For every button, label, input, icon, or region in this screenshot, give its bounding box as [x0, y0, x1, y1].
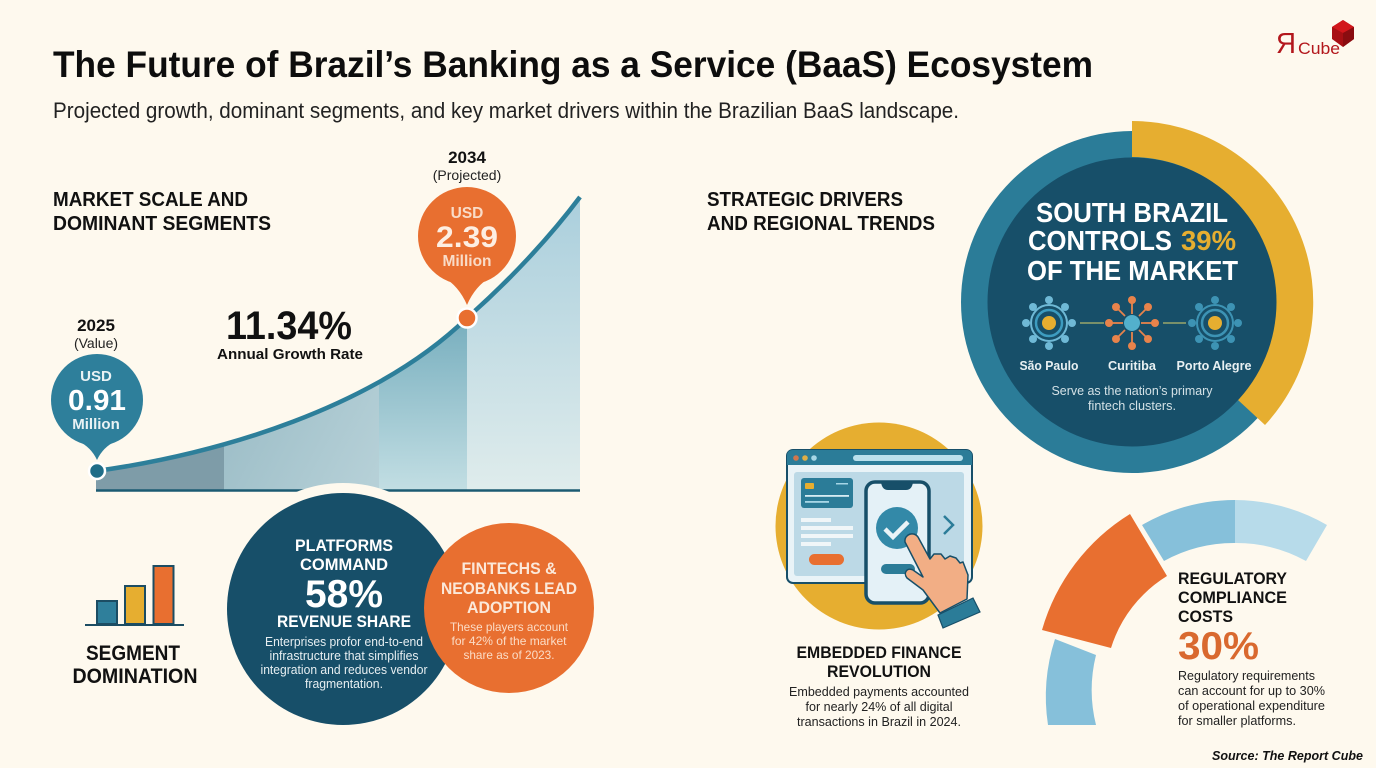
text: embedded finance: transactions in Brazil in 2024.	[797, 715, 961, 729]
browser window	[787, 450, 972, 583]
panel: platforms revenue share: PLATFORMS	[295, 537, 393, 555]
connector lines	[1080, 322, 1186, 324]
description: Serve as the nation’s primary	[1052, 383, 1213, 398]
heading: market scale: DOMINANT SEGMENTS	[53, 213, 271, 235]
panel: platforms revenue share: infrastructure that simplifies	[270, 649, 418, 663]
pin: 2025 value	[51, 354, 143, 479]
year label 2034	[433, 148, 501, 183]
headline: 39%	[1181, 225, 1236, 256]
heading: segment domination	[72, 642, 198, 688]
text: embedded finance: Embedded payments accounted	[789, 685, 969, 699]
panel: fintechs and neobanks: These players account	[450, 620, 569, 634]
text: regulatory compliance: 30%	[1178, 625, 1259, 668]
heading: strategic drivers	[707, 189, 935, 235]
inner dark disc	[988, 158, 1276, 446]
headline	[1027, 197, 1238, 286]
text: regulatory compliance: REGULATORY	[1178, 569, 1288, 588]
text: regulatory compliance: COMPLIANCE	[1178, 588, 1287, 607]
panel: fintechs and neobanks	[424, 523, 594, 693]
icon: São Paulo network	[1022, 296, 1076, 350]
city labels: Curitiba	[1108, 358, 1157, 373]
subtitle: Projected growth, dominant segments, and key market drivers within the Brazilian BaaS landscape.	[53, 98, 959, 123]
text: regulatory compliance	[1178, 569, 1325, 728]
heading: strategic drivers: STRATEGIC DRIVERS	[707, 189, 903, 211]
panel: platforms revenue share: integration and reduces vendor	[260, 663, 428, 677]
source note: Source: The Report Cube	[1212, 749, 1363, 763]
headline: CONTROLS	[1028, 225, 1172, 256]
panel: fintechs and neobanks: ADOPTION	[467, 599, 551, 617]
pin: 2034 projection	[418, 187, 516, 328]
year label 2025: (Value)	[74, 335, 118, 351]
city labels	[1020, 358, 1252, 373]
panel: fintechs and neobanks: for 42% of the market	[452, 634, 567, 648]
growth rate callout	[217, 304, 363, 363]
heading: market scale	[53, 189, 271, 235]
panel: platforms revenue share	[217, 483, 469, 735]
description	[1052, 383, 1213, 413]
icon: Porto Alegre network	[1188, 296, 1242, 350]
text: regulatory compliance: COSTS	[1178, 607, 1233, 626]
logo: RCube	[1276, 20, 1354, 60]
phone	[866, 482, 929, 603]
growth rate callout: Annual Growth Rate	[217, 347, 363, 363]
area chart: market growth curve	[96, 190, 580, 490]
text: regulatory compliance: can account for up to 30%	[1178, 684, 1325, 698]
panel: platforms revenue share: 58%	[305, 573, 383, 616]
logo: RCube: Cube	[1298, 39, 1340, 58]
panel: fintechs and neobanks: share as of 2023.	[464, 648, 554, 662]
year label 2034: 2034	[448, 148, 486, 167]
heading: market scale: MARKET SCALE AND	[53, 189, 248, 211]
panel: South Brazil donut	[961, 121, 1313, 473]
text: embedded finance	[789, 643, 969, 729]
year label 2025	[74, 316, 118, 351]
heading: segment domination: SEGMENT	[86, 642, 180, 665]
panel: fintechs and neobanks: FINTECHS &	[462, 560, 557, 578]
hand	[905, 534, 980, 628]
chart: regulatory arc gauge	[1042, 500, 1327, 725]
text: regulatory compliance: Regulatory requirements	[1178, 669, 1315, 683]
icon: embedded finance phone and browser	[776, 422, 982, 630]
growth rate callout: 11.34%	[226, 304, 352, 348]
panel: platforms revenue share: Enterprises profor end-to-end	[265, 635, 423, 649]
pin: 2034 projection: 2.39	[436, 221, 498, 254]
panel: platforms revenue share: fragmentation.	[305, 677, 383, 691]
icon: bar chart	[85, 566, 184, 625]
year label 2025: 2025	[77, 316, 115, 335]
heading: strategic drivers: AND REGIONAL TRENDS	[707, 213, 935, 235]
headline: OF THE MARKET	[1027, 255, 1238, 286]
yellow 39% arc	[1132, 121, 1313, 425]
panel: fintechs and neobanks: NEOBANKS LEAD	[441, 580, 577, 598]
pin: 2034 projection: Million	[442, 253, 492, 270]
city labels: São Paulo	[1020, 358, 1079, 373]
headline: SOUTH BRAZIL	[1036, 197, 1228, 228]
panel: platforms revenue share: REVENUE SHARE	[277, 613, 411, 631]
description: fintech clusters.	[1088, 398, 1176, 413]
heading: segment domination: DOMINATION	[72, 665, 198, 688]
logo: RCube: R	[1276, 28, 1296, 60]
year label 2034: (Projected)	[433, 167, 501, 183]
pin: 2025 value: Million	[72, 416, 120, 433]
pin: 2025 value: USD	[80, 368, 112, 385]
icon: Curitiba network	[1105, 296, 1159, 350]
pin: 2025 value: 0.91	[68, 385, 126, 417]
text: regulatory compliance: for smaller platforms.	[1178, 714, 1296, 728]
pin: 2034 projection: USD	[451, 205, 483, 222]
city labels: Porto Alegre	[1176, 358, 1252, 373]
text: regulatory compliance: of operational expenditure	[1178, 699, 1325, 713]
panel: platforms revenue share: COMMAND	[300, 556, 388, 574]
text: embedded finance: for nearly 24% of all digital	[806, 700, 952, 714]
text: embedded finance: EMBEDDED FINANCE	[796, 643, 962, 662]
text: embedded finance: REVOLUTION	[827, 662, 931, 681]
title: The Future of Brazil’s Banking as a Service (BaaS) Ecosystem	[53, 43, 1093, 85]
